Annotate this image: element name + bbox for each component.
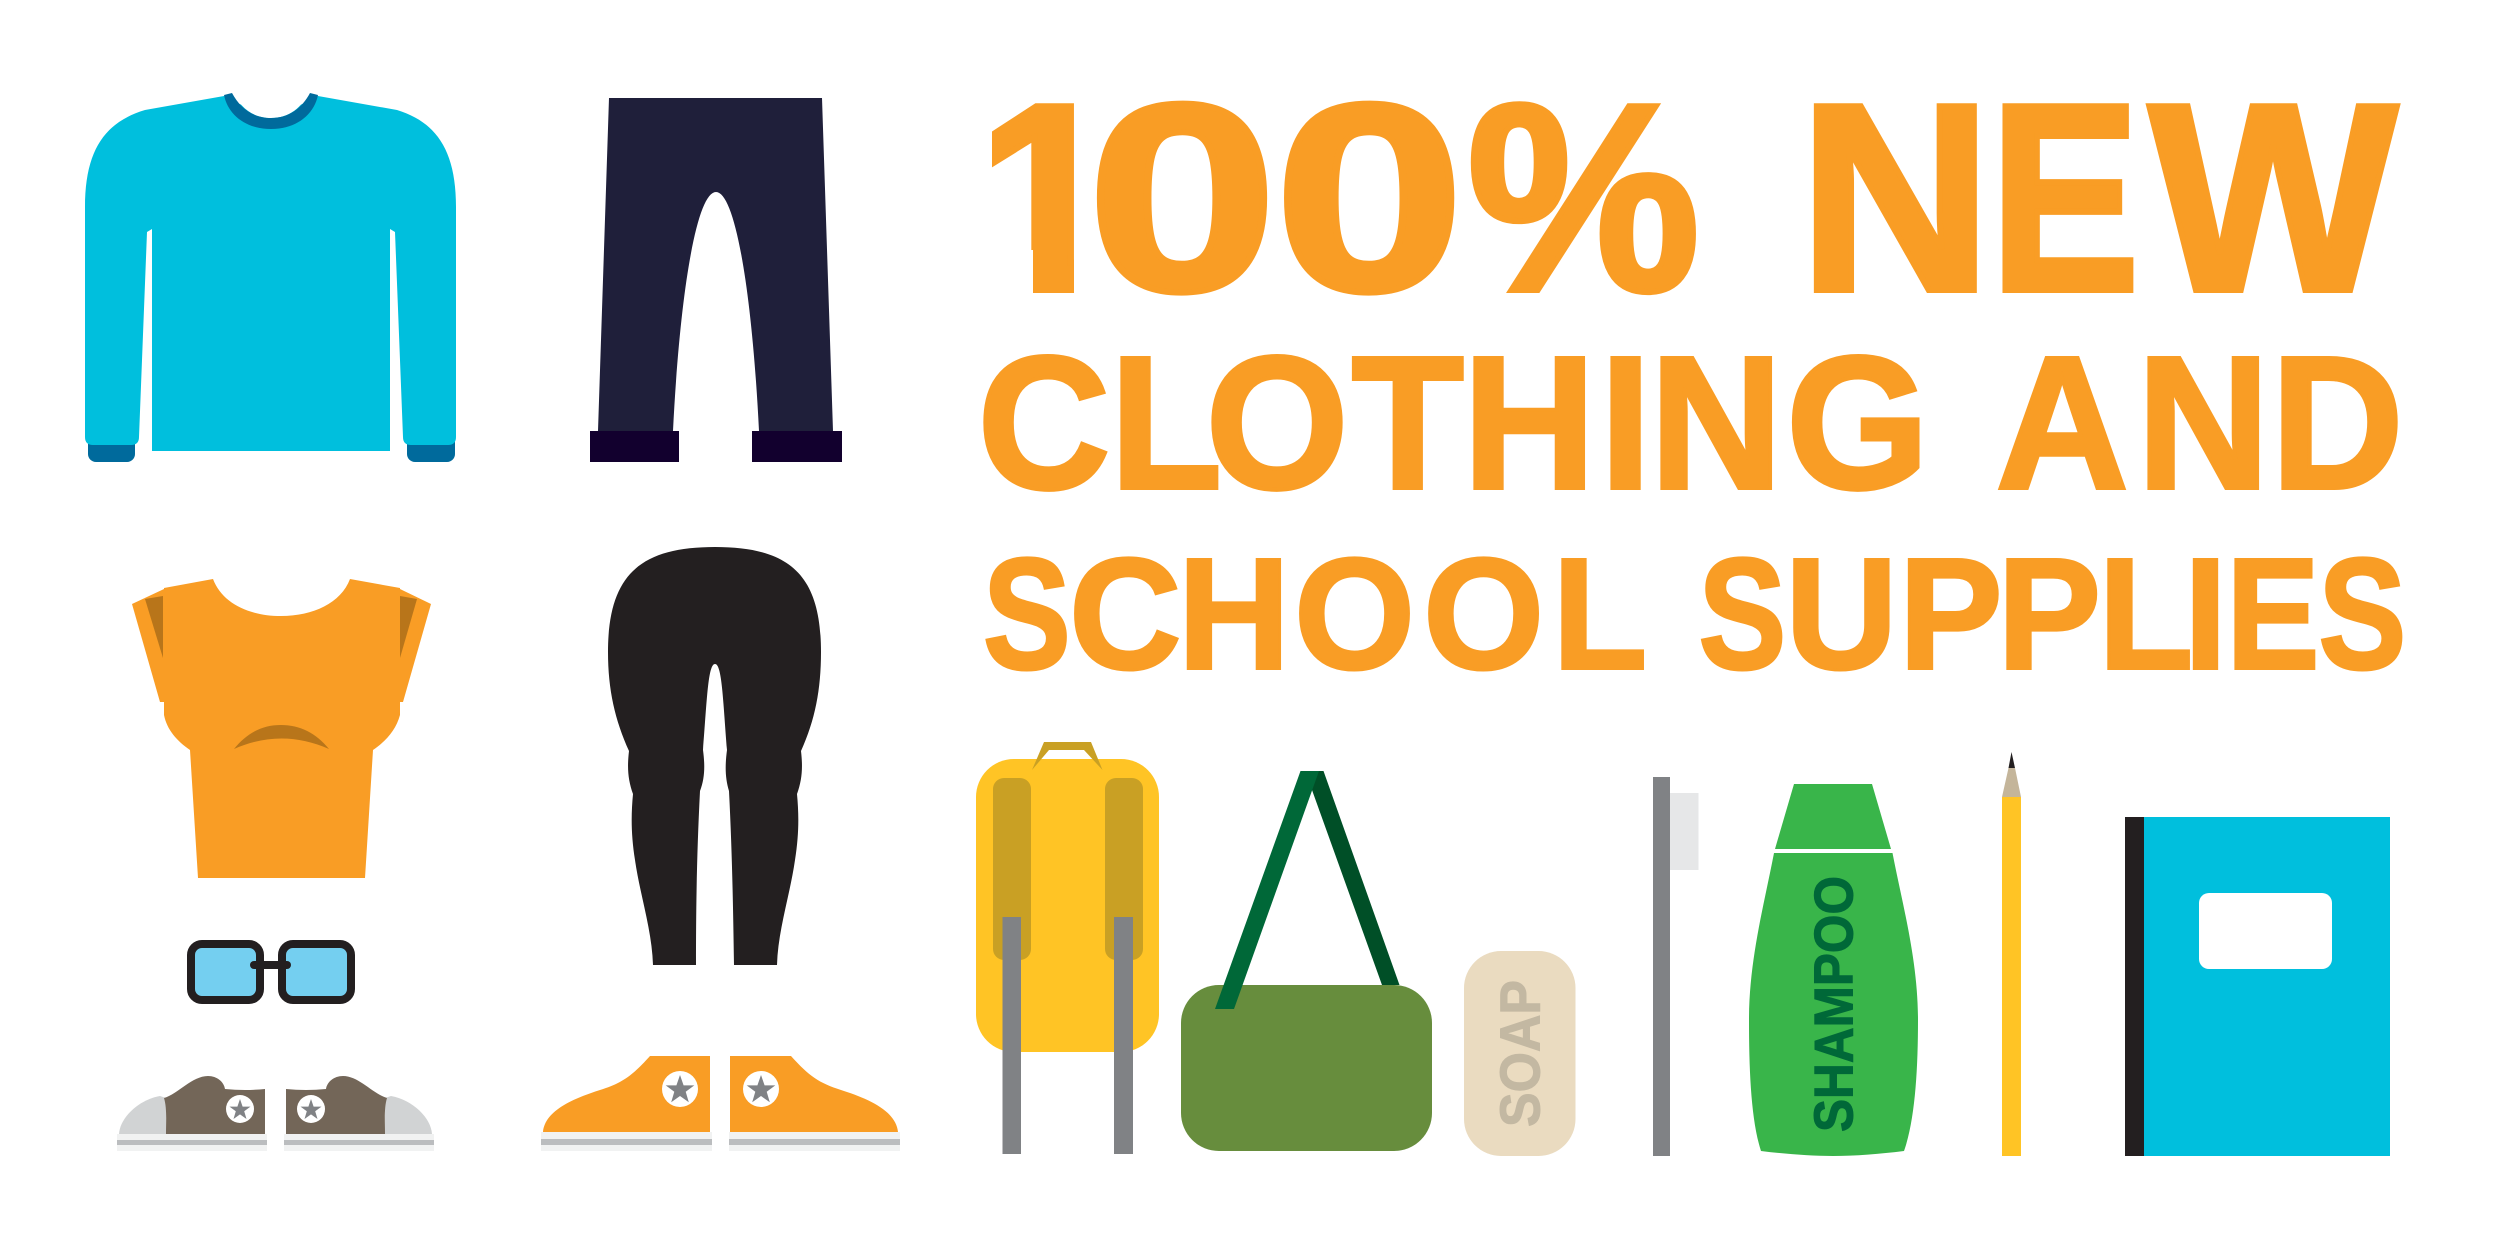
- icon: toothbrush: [1653, 777, 1698, 1156]
- title: [983, 100, 2402, 672]
- icon: black leggings: [608, 547, 821, 965]
- heading line 1: W: [2149, 49, 2400, 347]
- heading line 3: S: [1698, 525, 1786, 702]
- icon: orange high-top shoes: [541, 1056, 900, 1151]
- right shoe: [729, 1056, 900, 1151]
- heading line 3: [983, 525, 2406, 703]
- infographic canvas: [85, 93, 2402, 1156]
- heading line 3: CHOOL: [1069, 526, 1647, 703]
- soap label: SOAP: [1488, 980, 1552, 1127]
- icon: navy trousers: [590, 98, 842, 462]
- heading line 1: %: [1467, 50, 1700, 348]
- heading line 3: UPPLI: [1785, 526, 2227, 703]
- heading line 1: E: [1990, 50, 2140, 347]
- left shoe: [541, 1056, 712, 1151]
- heading line 1: 00: [1087, 48, 1464, 347]
- heading line 3: S: [983, 525, 1071, 702]
- heading line 2: AND: [1996, 317, 2403, 529]
- icon: blue sweater: [85, 90, 456, 462]
- icon: blue glasses: [191, 944, 351, 1000]
- icon: yellow backpack: [976, 742, 1159, 1154]
- icon: soap bar: [1464, 951, 1576, 1156]
- icon: orange t-shirt: [132, 579, 431, 878]
- heading line 1: [972, 48, 2400, 348]
- icon: green shoulder bag: [1181, 771, 1432, 1151]
- heading line 3: E: [2226, 525, 2319, 702]
- heading line 2: [978, 317, 2403, 529]
- icon: shampoo bottle: [1749, 784, 1918, 1156]
- icon: pencil: [2002, 752, 2021, 1156]
- shampoo label: SHAMPOO: [1802, 876, 1864, 1132]
- icon: brown low shoes: [117, 1076, 434, 1151]
- heading line 1: 1: [972, 48, 1120, 347]
- heading line 1: N: [1799, 48, 1992, 347]
- left shoe: [117, 1076, 267, 1151]
- heading line 2: CLOTHING: [978, 317, 1929, 529]
- right shoe: [284, 1076, 434, 1151]
- icon: blue notebook: [2125, 817, 2390, 1156]
- heading line 3: S: [2318, 525, 2406, 702]
